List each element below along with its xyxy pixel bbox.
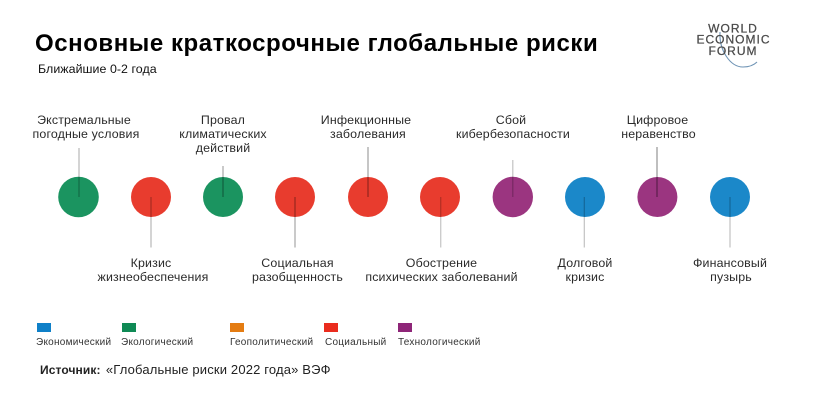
legend label: societal: Социальный [325, 337, 386, 348]
legend label: geopolitical: Геополитический [230, 337, 313, 348]
legend swatch: societal [324, 323, 338, 332]
risk 9 marker [637, 147, 677, 217]
legend label: environmental: Экологический [121, 337, 193, 348]
logo: World Economic Forum: WORLD [708, 22, 758, 36]
logo: World Economic Forum [696, 22, 770, 68]
legend [36, 323, 481, 348]
label: debt crisis: Долговой [558, 256, 612, 270]
label: mental health [365, 256, 518, 284]
label: extreme weather [33, 113, 139, 141]
label: social cohesion [252, 256, 343, 284]
risk 10 marker [710, 177, 750, 248]
label: mental health: Обострение [406, 256, 477, 270]
risk 1 marker [58, 148, 99, 217]
risk 3 marker [203, 166, 243, 217]
label: extreme weather: погодные условия [33, 127, 139, 141]
label: cybersecurity failure [456, 113, 570, 141]
label: climate action failure [179, 113, 267, 155]
label: debt crisis: кризис [566, 270, 604, 284]
label: livelihood crisis: жизнеобеспечения [98, 270, 208, 284]
label: livelihood crisis [98, 256, 208, 284]
legend swatch: economic [37, 323, 51, 332]
label: cybersecurity failure: Сбой [496, 113, 526, 127]
label: extreme weather: Экстремальные [37, 113, 131, 127]
logo: World Economic Forum: FORUM [708, 44, 758, 58]
legend label: economic: Экономический [36, 337, 111, 348]
label: digital inequality: Цифровое [627, 113, 688, 127]
risk 7 marker [493, 160, 533, 217]
risk 6 marker [420, 177, 460, 248]
label: climate action failure: действий [196, 141, 250, 155]
label: infectious diseases: Инфекционные [321, 113, 411, 127]
label: social cohesion: разобщенность [252, 270, 343, 284]
label: digital inequality: неравенство [621, 127, 696, 141]
risk 8 marker [565, 177, 605, 248]
source: Источник: «Глобальные риски 2022 года» ВЭФ [40, 362, 331, 377]
label: social cohesion: Социальная [261, 256, 334, 270]
label: infectious diseases: заболевания [330, 127, 406, 141]
label: cybersecurity failure: кибербезопасности [456, 127, 570, 141]
legend swatch: technological [398, 323, 412, 332]
label: mental health: психических заболеваний [365, 270, 518, 284]
risk 2 marker [131, 177, 171, 248]
subtitle: Ближайшие 0-2 года [38, 62, 157, 76]
label: climate action failure: Провал [201, 113, 245, 127]
logo: World Economic Forum: ECONOMIC [696, 32, 770, 46]
risk 4 marker [275, 177, 315, 248]
label: financial bubble: пузырь [710, 270, 752, 284]
label: climate action failure: климатических [179, 127, 267, 141]
label: debt crisis [558, 256, 612, 284]
label: digital inequality [621, 113, 696, 141]
legend swatch: environmental [122, 323, 136, 332]
risk 5 marker [348, 147, 388, 217]
label: financial bubble [693, 256, 767, 284]
title: Основные краткосрочные глобальные риски [35, 30, 598, 57]
legend swatch: geopolitical [230, 323, 244, 332]
label: infectious diseases [321, 113, 411, 141]
label: financial bubble: Финансовый [693, 256, 767, 270]
legend label: technological: Технологический [398, 337, 481, 348]
label: livelihood crisis: Кризис [131, 256, 171, 270]
